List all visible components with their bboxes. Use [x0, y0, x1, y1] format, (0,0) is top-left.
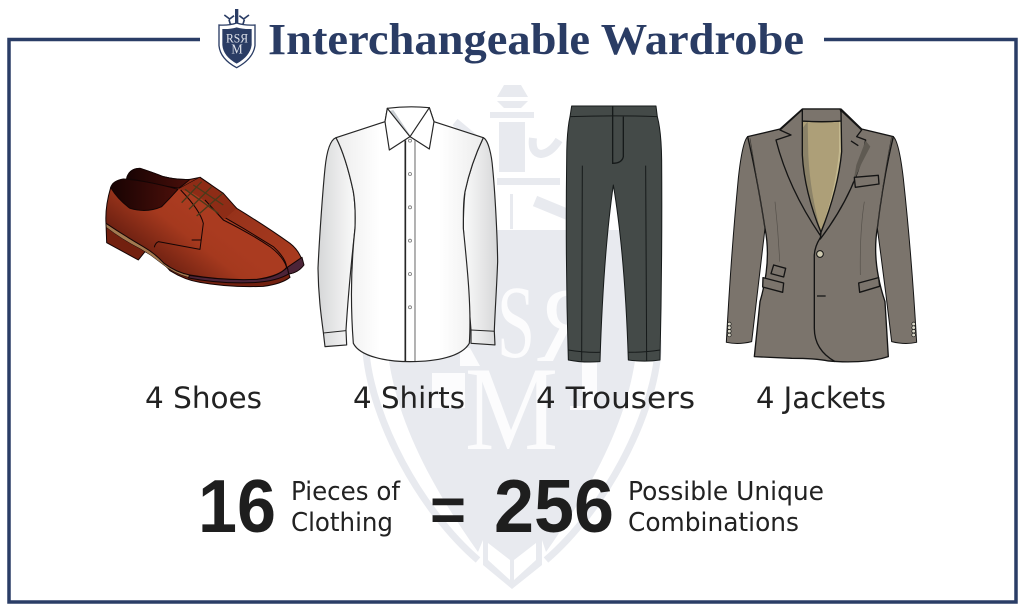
label: shirts: 4 Shirts — [353, 381, 465, 415]
watermark: monogram — [460, 265, 603, 475]
icon: trousers — [566, 106, 662, 362]
neck band — [801, 109, 842, 122]
buttonhole and details — [817, 141, 858, 296]
collar — [385, 108, 434, 150]
dart seams — [775, 202, 864, 275]
lining shadow — [802, 122, 821, 232]
watermark: letter gaps — [432, 360, 597, 410]
lapel shadow — [853, 141, 870, 182]
watermark: monogram: Я — [537, 266, 603, 385]
icon: shoes — [106, 168, 304, 287]
tongue and facing — [178, 177, 237, 220]
waistband — [570, 114, 657, 118]
seams — [154, 177, 287, 267]
logo — [219, 9, 255, 68]
back shoe opening — [127, 168, 190, 189]
logo shield inner — [222, 27, 252, 64]
text: pieces of clothing: Pieces of — [291, 477, 401, 507]
text: possible unique combinations: Possible Unique — [628, 477, 824, 507]
label: shoes: 4 Shoes — [145, 381, 262, 415]
title: Interchangeable Wardrobe — [268, 15, 804, 64]
watermark: shield tip — [488, 543, 536, 580]
text: pieces of clothing: Clothing — [291, 508, 393, 538]
body — [336, 122, 483, 362]
text: possible unique combinations: Combinations — [628, 508, 799, 538]
back toe welt — [287, 257, 304, 274]
laces — [182, 182, 223, 216]
left sleeve — [318, 138, 355, 347]
armhole seams — [750, 137, 892, 228]
jacket body — [748, 109, 893, 362]
left lapel — [776, 110, 821, 235]
back shoe — [127, 168, 303, 274]
placket — [403, 140, 408, 361]
jacket button — [817, 251, 823, 257]
logo shield — [219, 23, 255, 68]
text: pieces of clothing — [291, 477, 401, 538]
front sole — [106, 223, 290, 287]
collar shadow — [389, 110, 410, 135]
breast pocket — [854, 175, 879, 187]
right sleeve — [463, 138, 498, 345]
logo crown post — [235, 9, 238, 23]
placket edge — [413, 140, 417, 361]
title block — [219, 9, 804, 68]
collar back — [385, 107, 434, 137]
equals sign: = — [430, 476, 466, 545]
right lapel — [820, 110, 866, 239]
lining highlight — [822, 122, 842, 230]
jacket lining — [802, 121, 842, 232]
icon: jacket — [726, 109, 917, 362]
icon: shirt — [318, 107, 498, 362]
label: trousers: 4 Trousers — [536, 381, 695, 415]
trouser body — [566, 106, 662, 362]
sleeve buttons — [727, 322, 915, 337]
logo monogram: RSЯ — [226, 31, 248, 45]
watermark: crown arms — [455, 122, 569, 215]
creases — [568, 166, 660, 361]
item labels — [145, 381, 886, 415]
logo: M — [231, 41, 243, 56]
cuffs — [323, 330, 494, 333]
watermark: crest — [366, 85, 658, 589]
buttons — [408, 139, 411, 309]
equation — [198, 464, 824, 548]
number: 256: 256 — [494, 464, 614, 548]
lower pockets — [763, 265, 880, 292]
jacket sleeves — [726, 137, 917, 343]
watermark: monogram: M — [465, 342, 558, 475]
text: possible unique combinations — [628, 477, 824, 538]
label: jackets: 4 Jackets — [756, 381, 886, 415]
front welt tan — [106, 223, 190, 278]
logo crown — [224, 15, 249, 24]
number: 16: 16 — [198, 464, 276, 548]
front upper — [106, 177, 287, 280]
watermark: shield band — [366, 340, 658, 560]
front edge — [814, 238, 835, 362]
watermark: monogram: S — [497, 265, 535, 380]
front welt dark — [189, 267, 289, 283]
front opening — [111, 179, 178, 210]
fly — [613, 106, 623, 163]
watermark: shield body — [387, 230, 637, 589]
watermark: lantern post — [490, 85, 560, 229]
